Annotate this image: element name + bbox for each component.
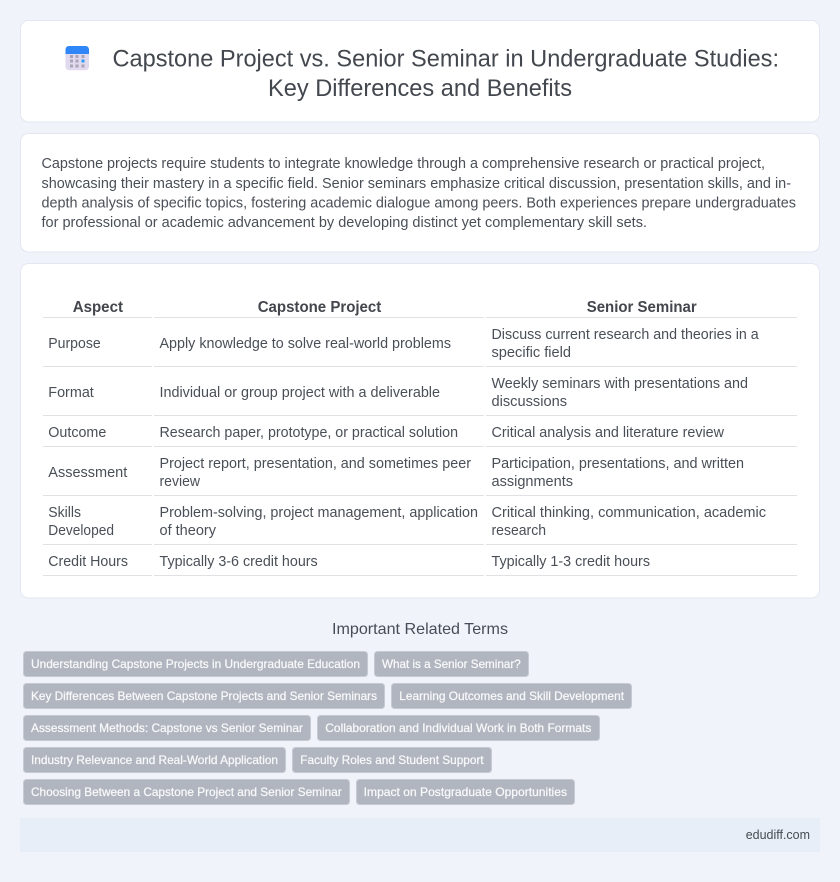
tag: faculty roles: [292, 748, 492, 772]
tag: industry relevance: [24, 748, 286, 772]
row: credit hours: Typically 3-6 credit hours: [160, 554, 318, 570]
tag: collaboration and individual work: [318, 716, 600, 740]
row: purpose: Apply knowledge to solve real-world problems: [160, 336, 451, 352]
tag: understanding capstone projects: [24, 652, 368, 676]
heading: important related terms: Important Related Terms: [332, 621, 508, 638]
footer source text: edudiff.com: [746, 827, 810, 842]
tag: learning outcomes: Learning Outcomes and Skill Development: [399, 689, 625, 703]
table header row: [43, 299, 797, 318]
panel: comparison table: [20, 264, 820, 598]
tag: assessment methods: Assessment Methods: Capstone vs Senior Seminar: [31, 721, 303, 735]
title text: Key Differences and Benefits: [268, 75, 572, 102]
row: assessment: assignments: [492, 474, 573, 490]
icon: calendar: [66, 46, 89, 70]
table header row: Senior Seminar: [587, 299, 697, 316]
row: outcome: Outcome: [48, 425, 106, 441]
row: outcome: Research paper, prototype, or practical solution: [160, 425, 458, 441]
row: credit hours: [43, 554, 797, 576]
row: format: Weekly seminars with presentations and: [492, 376, 748, 392]
paragraph text: [42, 156, 796, 231]
row: outcome: Critical analysis and literature review: [492, 425, 725, 441]
row: skills developed: Skills: [48, 505, 81, 521]
row: assessment: [43, 456, 797, 496]
tag: industry relevance: Industry Relevance and Real-World Application: [31, 753, 278, 767]
table header row: Capstone Project: [258, 299, 382, 316]
tag: learning outcomes: [392, 684, 632, 708]
tag: what is a senior seminar: [374, 652, 528, 676]
row: format: Format: [48, 385, 94, 401]
table header row: Aspect: [73, 299, 124, 316]
row: outcome: [43, 425, 797, 447]
row: purpose: Discuss current research and theories in a: [492, 327, 759, 343]
row: assessment: Project report, presentation, and sometimes peer: [160, 456, 471, 472]
row: skills developed: [43, 505, 797, 545]
tag list: related terms: [24, 652, 632, 804]
tag: key differences: [24, 684, 384, 708]
row: assessment: review: [160, 474, 201, 490]
tag: faculty roles: Faculty Roles and Student Support: [300, 753, 484, 767]
tag: impact on postgraduate opportunities: Impact on Postgraduate Opportunities: [364, 785, 567, 799]
paragraph text: Capstone projects require students to integrate knowledge through a comprehensive research or practical project,: [42, 156, 765, 172]
row: assessment: Participation, presentations, and written: [492, 456, 744, 472]
tag: choosing between: Choosing Between a Capstone Project and Senior Seminar: [31, 785, 342, 799]
title text: [112, 46, 779, 102]
title text: Capstone Project vs. Senior Seminar in Undergraduate Studies:: [112, 46, 779, 72]
panel: title: [20, 20, 820, 122]
paragraph text: for professional or academic advancement by developing distinct yet complementary skill sets.: [42, 215, 647, 231]
row: credit hours: Credit Hours: [48, 554, 128, 570]
paragraph text: depth analysis of specific topics, fostering academic dialogue among peers. Both experiences prepare undergraduates: [42, 196, 796, 212]
row: assessment: Assessment: [48, 465, 127, 481]
paragraph text: showcasing their mastery in a specific field. Senior seminars emphasize critical discussion, presentation skills, and in-: [42, 176, 791, 192]
row: format: [43, 376, 797, 416]
row: purpose: [43, 327, 797, 367]
tag: understanding capstone projects: Understanding Capstone Projects in Undergraduate Education: [31, 657, 360, 671]
footer: [20, 818, 820, 852]
row: format: Individual or group project with a deliverable: [160, 385, 440, 401]
row: skills developed: research: [492, 523, 546, 539]
row: purpose: Purpose: [48, 336, 101, 352]
row: skills developed: Critical thinking, communication, academic: [492, 505, 766, 521]
row: purpose: specific field: [492, 345, 571, 361]
tag: key differences: Key Differences Between Capstone Projects and Senior Seminars: [31, 689, 377, 703]
tag: what is a senior seminar: What is a Senior Seminar?: [382, 657, 521, 671]
tag: assessment methods: [24, 716, 310, 740]
tag: collaboration and individual work: Collaboration and Individual Work in Both Formats: [325, 721, 591, 735]
tag: impact on postgraduate opportunities: [356, 780, 574, 804]
row: skills developed: Problem-solving, project management, application: [160, 505, 478, 521]
tag: choosing between: [24, 780, 350, 804]
panel: introduction paragraph: [20, 134, 820, 252]
row: format: discussions: [492, 394, 567, 410]
row: skills developed: Developed: [48, 523, 114, 539]
row: credit hours: Typically 1-3 credit hours: [492, 554, 650, 570]
row: skills developed: of theory: [160, 523, 217, 539]
